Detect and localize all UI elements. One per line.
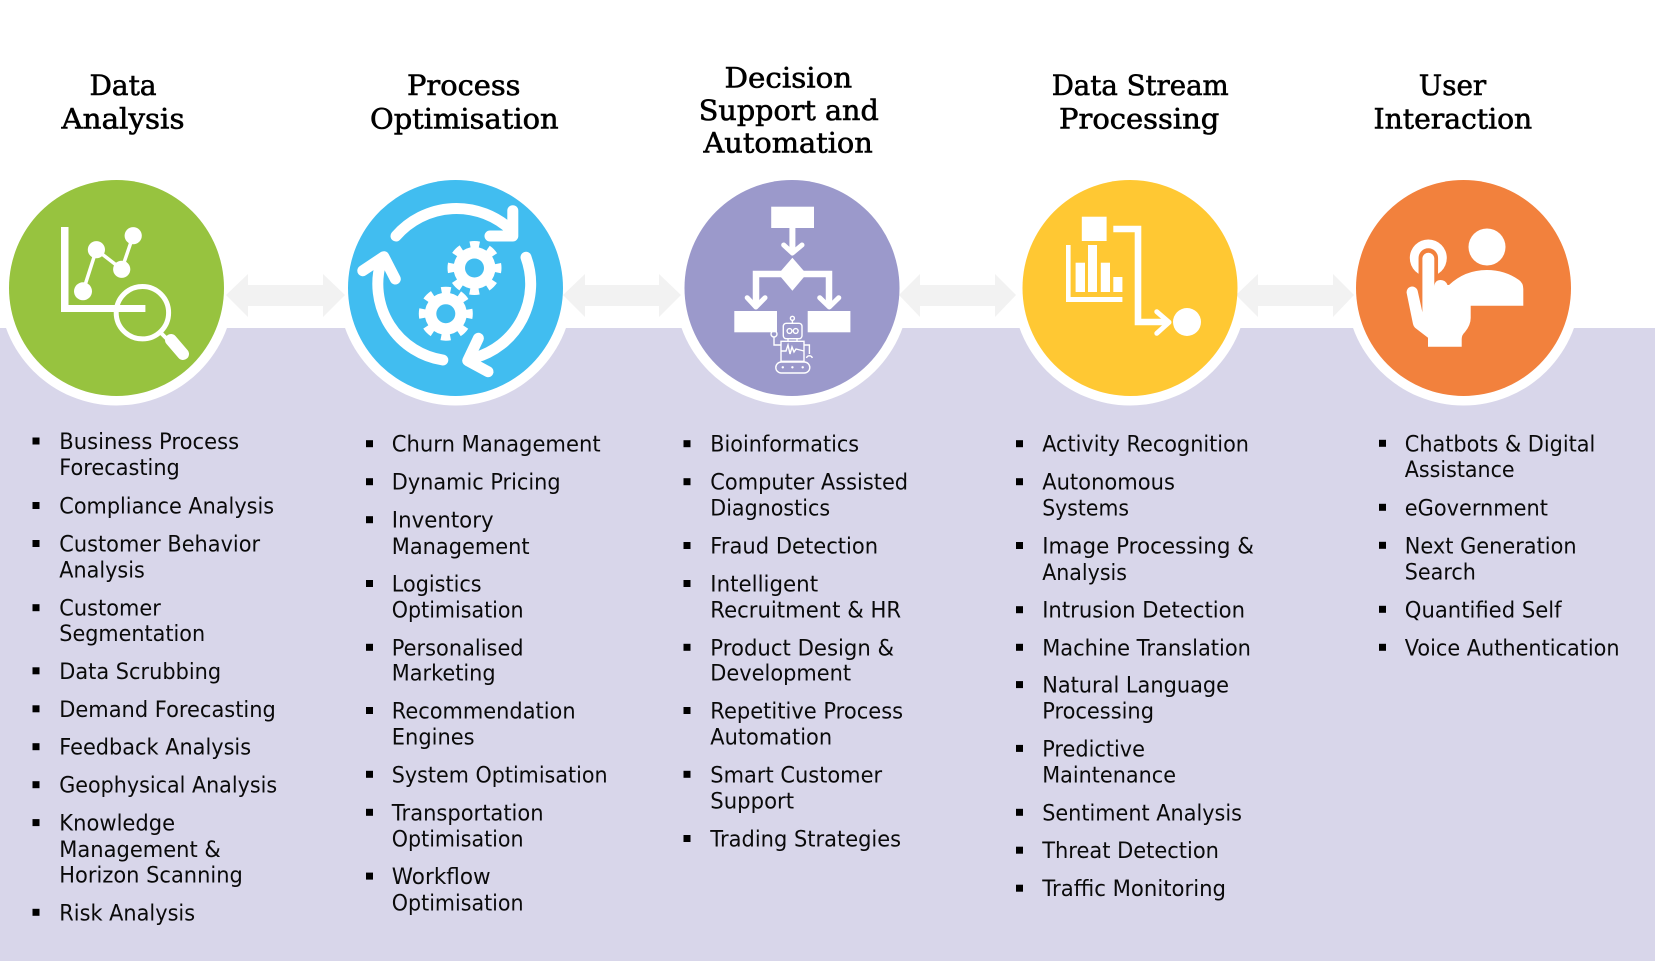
item: Business Process	[59, 429, 239, 455]
item	[684, 572, 901, 624]
list: Process Optimisation items	[366, 432, 608, 916]
item: Intrusion Detection	[1042, 598, 1245, 624]
item: Workflow	[392, 864, 491, 890]
item: Optimisation	[392, 598, 524, 624]
circle: purple	[684, 180, 900, 396]
icon: cycle arrows with gears	[363, 208, 531, 372]
item: Activity Recognition	[1042, 432, 1249, 458]
heading: User Interaction	[1374, 69, 1532, 135]
item: Diagnostics	[710, 496, 830, 522]
item: Natural Language	[1042, 673, 1229, 699]
item: Autonomous	[1042, 470, 1175, 496]
item: Horizon Scanning	[59, 863, 243, 889]
item: Customer Behavior	[59, 532, 261, 558]
item: Quantified Self	[1405, 597, 1563, 623]
panel: Process Optimisation	[348, 69, 608, 916]
item	[1016, 470, 1175, 522]
item: Maintenance	[1042, 762, 1176, 788]
item: Machine Translation	[1042, 635, 1251, 661]
item	[32, 811, 243, 889]
item: Image Processing &	[1042, 534, 1254, 560]
icon: touch hand and person	[1407, 228, 1523, 347]
item	[684, 635, 894, 686]
item	[684, 762, 883, 814]
item: Chatbots & Digital	[1405, 431, 1595, 457]
item: Logistics	[392, 572, 482, 598]
item	[32, 596, 205, 647]
item: eGovernment	[1405, 495, 1548, 521]
item: Systems	[1042, 496, 1129, 522]
item: Intelligent	[710, 572, 818, 598]
heading: User Interaction: Interaction	[1374, 102, 1532, 135]
item: Compliance Analysis	[59, 494, 274, 520]
item	[1016, 534, 1254, 586]
heading: Data Analysis: Analysis	[60, 102, 184, 135]
item: Search	[1405, 559, 1476, 585]
lavender background band	[0, 328, 1655, 961]
circle: orange	[1356, 180, 1571, 396]
item: Marketing	[392, 660, 496, 686]
item	[366, 635, 524, 686]
item: Management	[392, 534, 530, 560]
item: Product Design &	[710, 635, 894, 661]
item: Inventory	[392, 508, 494, 534]
circle: green	[9, 180, 224, 396]
circle: blue	[348, 180, 563, 396]
item: Optimisation	[392, 890, 524, 916]
item: Next Generation	[1405, 533, 1577, 559]
item	[32, 532, 261, 584]
item: Knowledge	[59, 811, 175, 837]
item: Data Scrubbing	[59, 659, 221, 685]
item: Feedback Analysis	[59, 735, 251, 761]
heading: Decision Support and Automation: Automation	[702, 126, 873, 159]
item: Development	[710, 660, 851, 686]
item	[1016, 736, 1176, 788]
list: Data Analysis items	[32, 429, 277, 926]
circle: yellow	[1022, 180, 1238, 396]
list: Decision Support items	[684, 432, 908, 852]
heading: Data Analysis: Data	[90, 69, 156, 102]
item	[1016, 673, 1229, 724]
item: Recommendation	[392, 698, 576, 724]
item: Optimisation	[392, 826, 524, 852]
item: Engines	[392, 725, 475, 751]
item: Fraud Detection	[710, 534, 878, 560]
item	[366, 508, 530, 560]
item	[366, 698, 576, 751]
item: Transportation	[391, 800, 544, 826]
item: Processing	[1042, 698, 1154, 724]
panel: Decision Support and Automation	[684, 61, 908, 853]
heading: User Interaction: User	[1419, 69, 1487, 102]
item: Repetitive Process	[710, 698, 903, 724]
item	[684, 698, 903, 751]
item: Threat Detection	[1041, 838, 1219, 864]
arrow: decision support to data stream	[899, 274, 1016, 317]
item: Demand Forecasting	[59, 697, 276, 723]
item: Dynamic Pricing	[392, 470, 561, 496]
item	[1379, 533, 1577, 585]
icon: data stream chart	[1066, 217, 1201, 336]
item: Analysis	[59, 558, 145, 584]
item: Sentiment Analysis	[1042, 800, 1242, 826]
panel: User Interaction	[1356, 69, 1620, 661]
heading: Data Stream Processing	[1052, 69, 1229, 135]
icon: line chart with magnifier	[61, 227, 183, 354]
arrow: data analysis to process optimisation	[226, 274, 345, 317]
item: Computer Assisted	[710, 470, 908, 496]
heading: Process Optimisation: Process	[407, 69, 520, 102]
item	[366, 572, 524, 624]
item: Churn Management	[392, 432, 601, 458]
heading: Decision Support and Automation	[699, 61, 879, 159]
heading: Process Optimisation	[370, 69, 559, 135]
item: Forecasting	[59, 455, 180, 481]
item: Customer	[59, 596, 161, 622]
item: Analysis	[1042, 560, 1127, 586]
heading: Decision Support and Automation: Decision	[724, 61, 852, 94]
item: Voice Authentication	[1405, 635, 1620, 661]
item: Smart Customer	[710, 762, 883, 788]
heading: Data Analysis	[60, 69, 184, 135]
item	[32, 429, 239, 481]
item	[366, 800, 544, 852]
item: Recruitment & HR	[710, 598, 901, 624]
item: Risk Analysis	[59, 900, 195, 926]
item: Assistance	[1405, 457, 1515, 483]
item: Geophysical Analysis	[59, 773, 277, 799]
item	[684, 470, 908, 522]
item: Personalised	[392, 635, 524, 661]
list: User Interaction items	[1379, 431, 1620, 661]
item	[1379, 431, 1595, 483]
item: Automation	[710, 725, 832, 751]
item: Bioinformatics	[710, 432, 859, 458]
panel: Data Analysis	[9, 69, 277, 926]
heading: Data Stream Processing: Data Stream	[1052, 69, 1229, 102]
arrow: process optimisation to decision support	[563, 274, 681, 317]
item	[366, 864, 524, 916]
item: Management &	[59, 837, 221, 863]
arrow: data stream to user interaction	[1236, 274, 1354, 317]
heading: Decision Support and Automation: Support and	[699, 94, 879, 127]
heading: Process Optimisation: Optimisation	[370, 102, 559, 135]
item: Segmentation	[59, 621, 205, 647]
item: Support	[710, 788, 794, 814]
list: Data Stream items	[1016, 432, 1254, 902]
item: Predictive	[1042, 736, 1145, 762]
heading: Data Stream Processing: Processing	[1059, 102, 1219, 135]
item: Trading Strategies	[709, 826, 901, 852]
item: System Optimisation	[392, 762, 608, 788]
icon: flowchart with robot	[734, 207, 850, 373]
item: Traffic Monitoring	[1041, 876, 1226, 902]
panel: Data Stream Processing	[1016, 69, 1254, 902]
